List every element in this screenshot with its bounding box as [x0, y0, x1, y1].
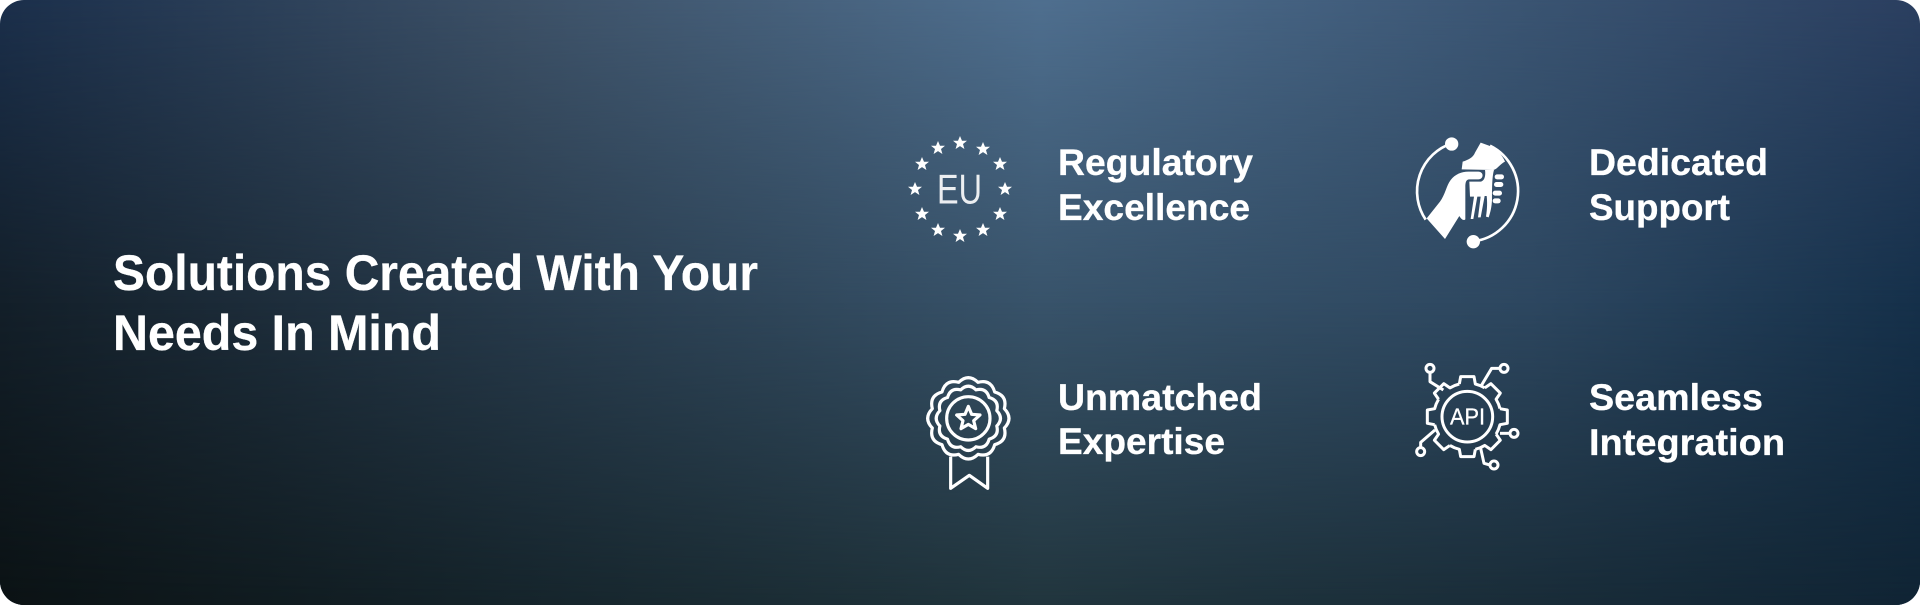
label: Unmatched Expertise: Unmatched	[1058, 377, 1262, 418]
label: Unmatched Expertise: Expertise	[1058, 421, 1225, 462]
title: Needs In Mind	[113, 305, 441, 361]
label: Regulatory Excellence: Regulatory	[1058, 142, 1253, 183]
label: Seamless Integration: Seamless	[1589, 377, 1763, 418]
label: Seamless Integration	[1589, 377, 1785, 463]
label: Unmatched Expertise	[1058, 377, 1262, 462]
label: Dedicated Support	[1589, 142, 1768, 228]
title: Solutions Created With Your	[113, 245, 758, 301]
icon: API gear	[1417, 364, 1518, 469]
icon: EU stars: EU	[937, 166, 982, 212]
icon: award ribbon	[928, 378, 1009, 488]
icon: EU stars	[908, 136, 1012, 242]
label: Seamless Integration: Integration	[1589, 422, 1785, 463]
label: Regulatory Excellence	[1058, 142, 1253, 228]
label: Regulatory Excellence: Excellence	[1058, 187, 1250, 228]
label: Dedicated Support: Dedicated	[1589, 142, 1768, 183]
icon: API gear: API	[1450, 404, 1485, 430]
label: Dedicated Support: Support	[1589, 187, 1730, 228]
icon: handshake	[1417, 137, 1518, 248]
title	[113, 245, 758, 361]
